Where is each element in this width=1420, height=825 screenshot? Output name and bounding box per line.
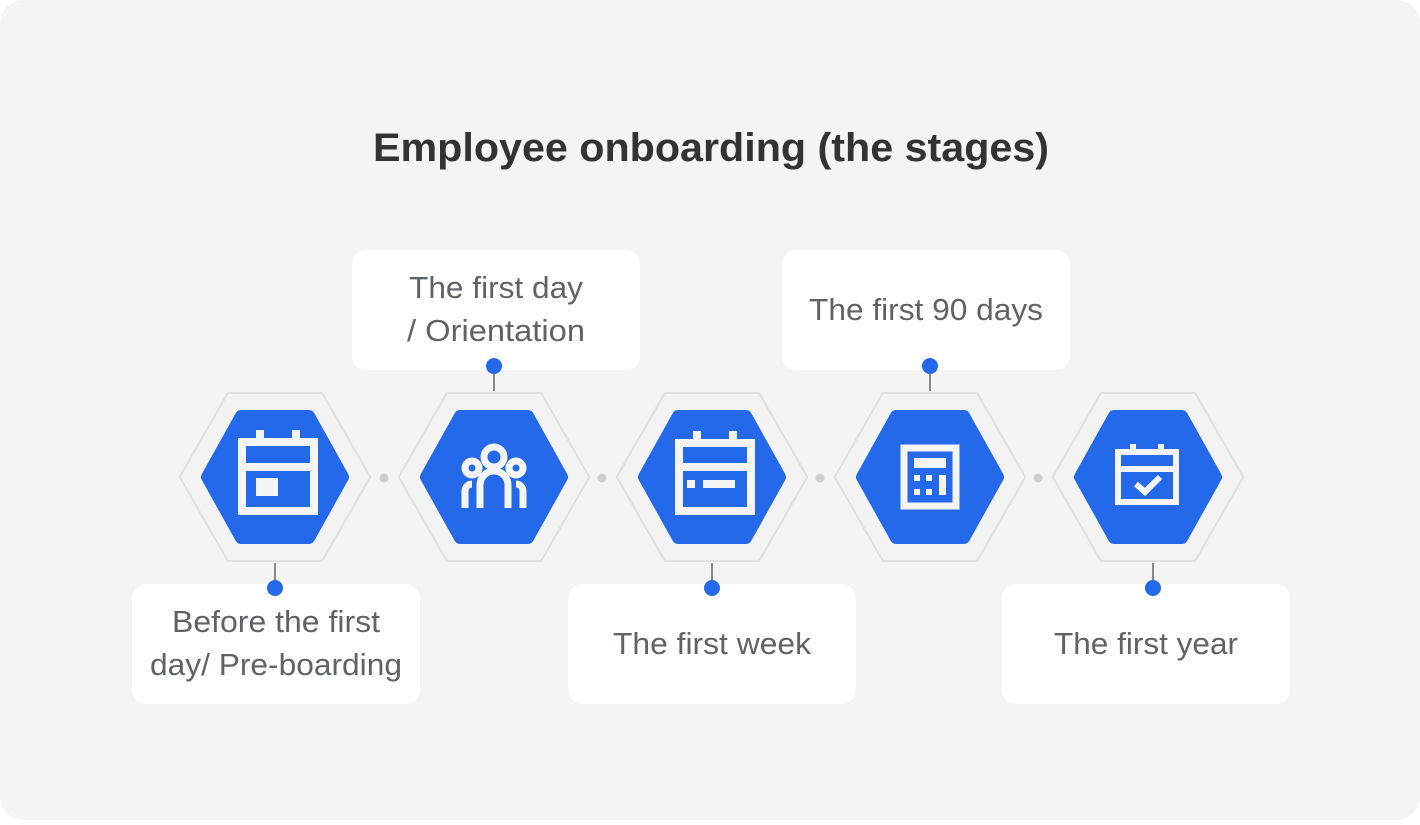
stage 2: first day — [401, 366, 587, 559]
stage 3: first week — [619, 395, 805, 588]
card: first 90 days: The first 90 days — [809, 292, 1043, 327]
card: first 90 days — [782, 250, 1070, 374]
card: first day / orientation — [352, 250, 640, 374]
icon: calendar — [242, 430, 314, 511]
card: first day / orientation: The first day — [409, 270, 584, 305]
card: before the first day: day/ Pre-boarding — [150, 647, 402, 682]
stage 4: first 90 days — [837, 366, 1023, 559]
card: first day / orientation: / Orientation — [407, 313, 585, 348]
card: before the first day — [132, 580, 420, 704]
card: before the first day: Before the first — [172, 604, 380, 639]
stage 1: before the first day — [182, 395, 368, 588]
card: first year — [1002, 580, 1290, 704]
title: Employee onboarding (the stages) — [373, 126, 1049, 170]
icon: calculator — [904, 448, 956, 506]
icon: calendar check — [1118, 444, 1176, 502]
stage 5: first year — [1055, 395, 1241, 588]
card: first week — [568, 580, 856, 704]
connector dots between hexagons — [380, 474, 1042, 482]
icon: calendar with dash — [679, 431, 751, 511]
icon: people — [465, 447, 523, 508]
card: first week: The first week — [613, 626, 812, 661]
card: first year: The first year — [1054, 626, 1238, 661]
